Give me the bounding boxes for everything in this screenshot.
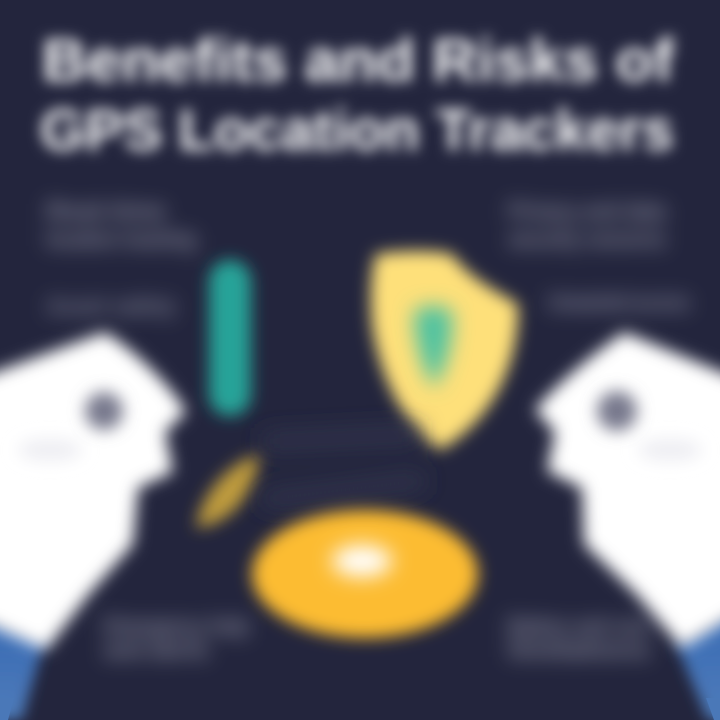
text block: top left xyxy=(46,198,196,253)
text block: top right: security concerns xyxy=(508,226,666,253)
right sleeve base xyxy=(706,698,720,720)
left sleeve xyxy=(0,605,46,720)
text block: bottom left xyxy=(104,613,249,664)
text block: bottom left: Emergency help xyxy=(104,613,249,640)
left eye xyxy=(85,392,123,430)
title xyxy=(40,27,675,163)
right head and body xyxy=(535,332,720,648)
icon: teal exclamation bar xyxy=(209,260,251,416)
text block: top right xyxy=(508,198,667,253)
disc highlight xyxy=(332,545,392,577)
text block: bottom right: Battery and cost xyxy=(508,613,650,640)
text block: bottom right: limitations xyxy=(508,637,650,664)
left face shade xyxy=(18,439,82,461)
text block: top left: location tracking xyxy=(46,226,196,253)
left head and body xyxy=(0,332,186,650)
text block: bottom right xyxy=(508,613,650,664)
right eye xyxy=(597,391,637,431)
text block: top left: Real-time xyxy=(46,198,166,225)
title: GPS Location Trackers xyxy=(40,98,674,163)
left sleeve base xyxy=(0,698,14,720)
right sleeve xyxy=(676,590,720,720)
text block: middle left: Asset safety xyxy=(46,293,177,320)
figure: right person xyxy=(535,332,720,720)
icon: shield keyhole xyxy=(414,306,452,388)
right face shade xyxy=(638,439,702,461)
text block: bottom left: and alerts xyxy=(104,637,209,664)
icon: shield xyxy=(371,251,518,450)
connector lines xyxy=(262,434,425,500)
title: Benefits and Risks of xyxy=(42,27,675,94)
figure: left person xyxy=(0,332,186,720)
icon: small gold leaf xyxy=(196,454,260,528)
text block: top right: Privacy and data xyxy=(508,198,667,225)
icon: gold location disc xyxy=(252,510,478,638)
